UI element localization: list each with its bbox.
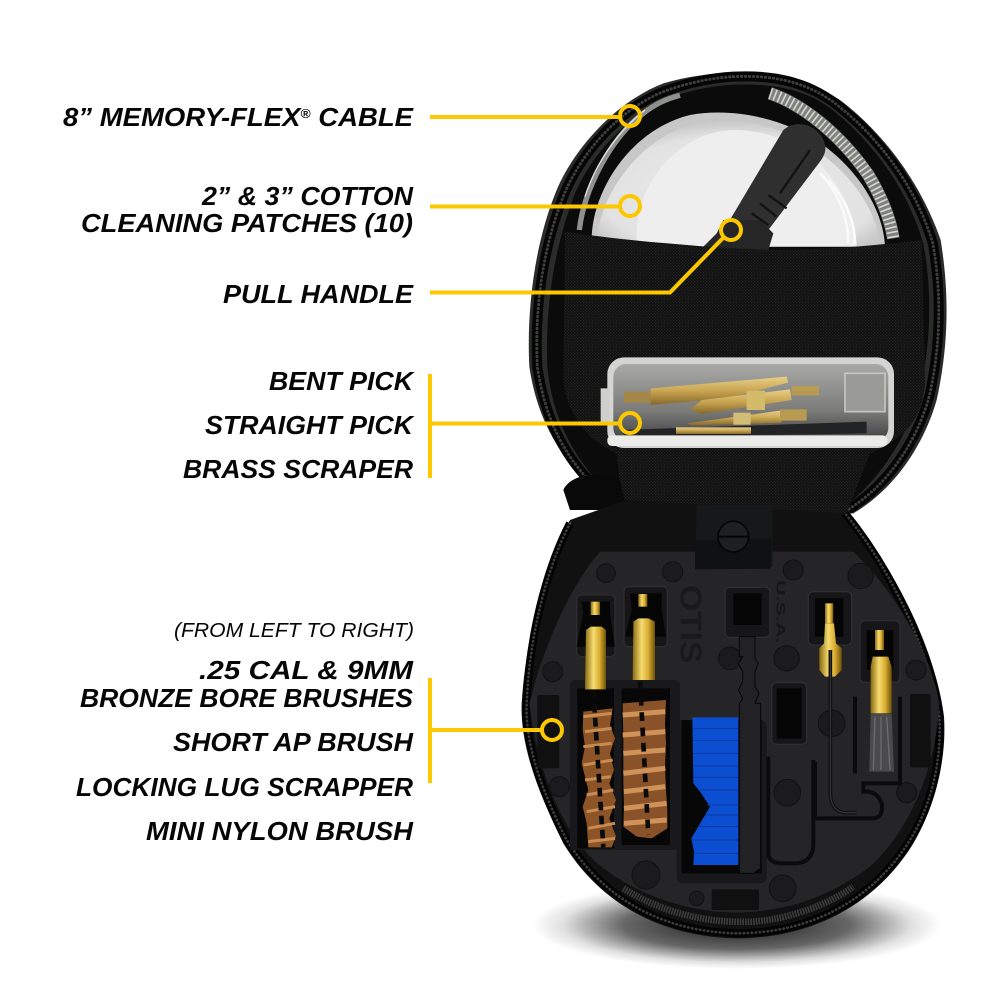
- label: straight pick: STRAIGHT PICK: [205, 410, 415, 440]
- callout: handle: [430, 220, 741, 292]
- mini nylon brush: [869, 630, 894, 772]
- lower zipper: [527, 513, 940, 933]
- label: short brush: SHORT AP BRUSH: [173, 727, 414, 757]
- upper pouch lid: [529, 72, 947, 515]
- labels: [63, 102, 415, 846]
- moulded tray: [529, 552, 939, 913]
- label: brass scraper: BRASS SCRAPER: [183, 454, 413, 484]
- tray slots and recess outlines: [537, 680, 931, 910]
- steel cable: [579, 93, 893, 238]
- label: scrapper: LOCKING LUG SCRAPPER: [76, 772, 413, 802]
- label: bore brushes: [80, 655, 415, 713]
- callout: cable: [430, 106, 640, 126]
- blue nylon bristles: [691, 717, 738, 865]
- label: bore brushes: BRONZE BORE BRUSHES: [80, 683, 414, 713]
- coiled cable: [623, 887, 853, 922]
- tray mould circles: [543, 560, 926, 906]
- lid shell: [529, 72, 947, 513]
- strap clip: [695, 505, 773, 569]
- pull handle: [700, 124, 825, 250]
- callout: patches: [430, 196, 640, 216]
- lower pouch: [522, 500, 944, 938]
- hinge strap: [625, 445, 846, 515]
- ground shadow: [532, 881, 942, 969]
- label: patches: [81, 181, 414, 238]
- callout: picks bracket: [430, 374, 640, 478]
- OTIS tray lettering: OTIS: [674, 585, 708, 663]
- label: patches: CLEANING PATCHES (10): [81, 208, 413, 238]
- 25 cal brush: [582, 602, 616, 847]
- label: cable: CABLE: [311, 102, 414, 132]
- 9mm brush: [623, 594, 667, 838]
- locking lug scraper with nylon brush: [691, 637, 761, 873]
- brass picks and scraper: [624, 377, 819, 434]
- label: cable: ®: [300, 106, 311, 121]
- callout: brushes bracket: [430, 678, 562, 783]
- label: mini brush: MINI NYLON BRUSH: [146, 816, 414, 846]
- zipper pull tab: [563, 475, 627, 510]
- lower shell: [522, 500, 944, 938]
- callout lines: [430, 106, 741, 783]
- MADE IN USA tray lettering: U.S.A.: [774, 580, 788, 643]
- label: patches: 2” & 3” COTTON: [201, 181, 414, 211]
- cotton patches: [592, 113, 885, 247]
- label: cable: 8” MEMORY-FLEX: [63, 102, 287, 132]
- label: bore brushes: .25 CAL & 9MM: [199, 655, 415, 685]
- pick holder tools: [819, 603, 857, 813]
- brush holder clips: [577, 587, 900, 744]
- bronze bore brushes: [582, 594, 667, 847]
- locator outlines: [768, 697, 900, 863]
- lid lining: [547, 84, 929, 507]
- plastic pick case: [601, 357, 894, 448]
- kit pouch: [522, 72, 947, 938]
- mesh pocket: [563, 232, 925, 513]
- label: handle: PULL HANDLE: [223, 279, 414, 309]
- pin with sleeve: [825, 603, 833, 623]
- zipper teeth: [537, 76, 939, 509]
- scraper handle: [738, 637, 761, 873]
- label: from left to right: (FROM LEFT TO RIGHT): [174, 620, 414, 642]
- label: bent pick: BENT PICK: [269, 366, 415, 396]
